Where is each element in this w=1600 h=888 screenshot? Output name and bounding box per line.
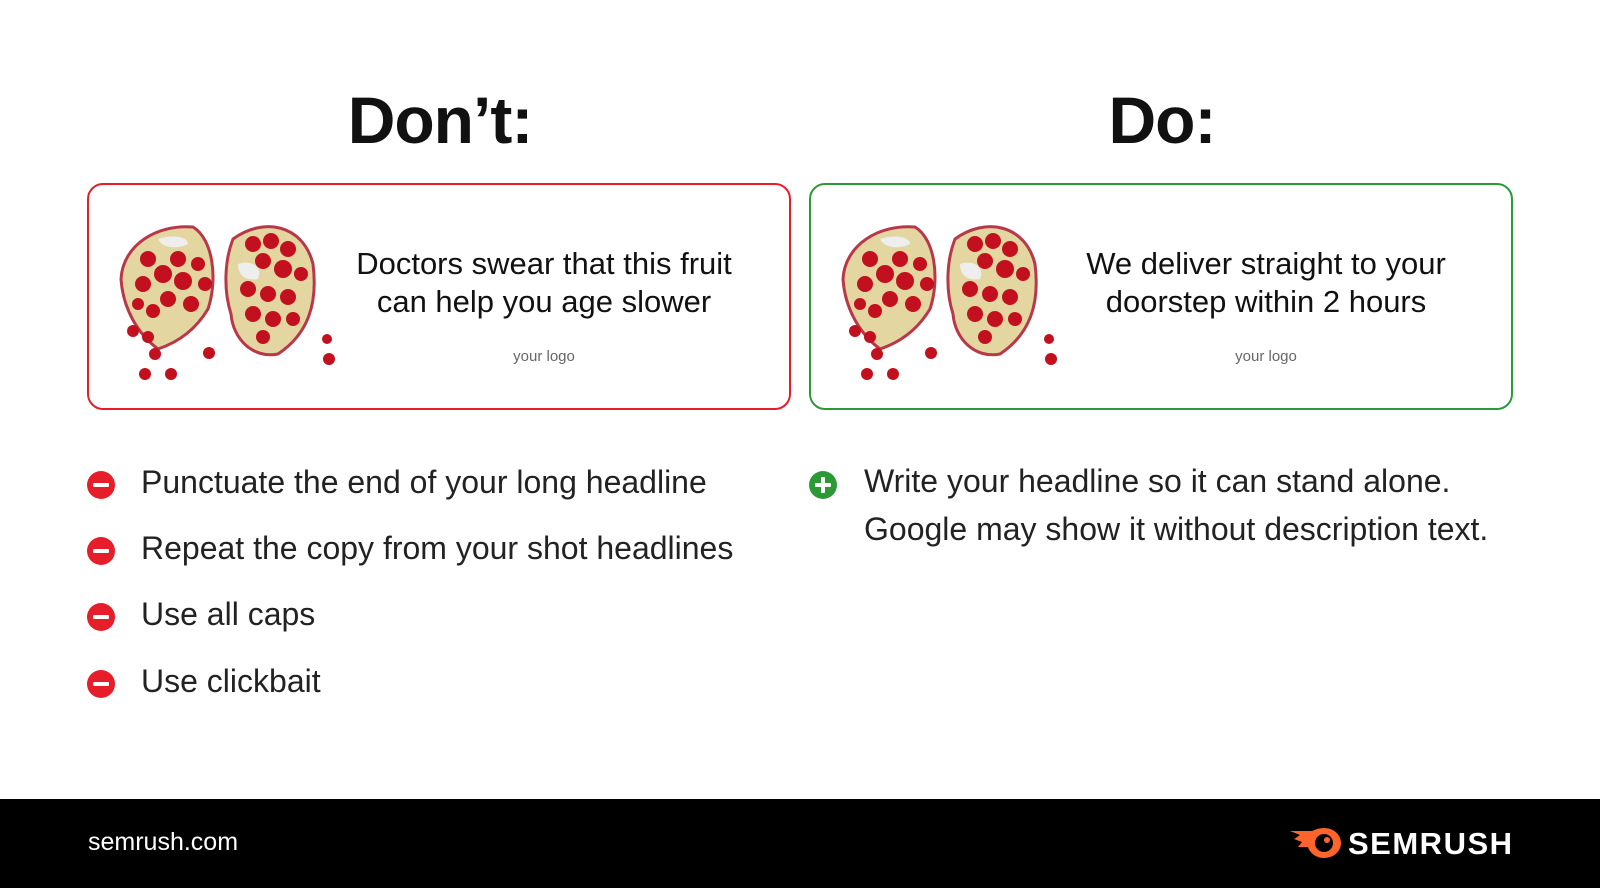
ad headline: We deliver straight to your xyxy=(1086,246,1446,281)
panel: dont example ad xyxy=(87,183,791,410)
logo wordmark: SEMRUSH xyxy=(1348,826,1514,861)
footer xyxy=(0,799,1600,888)
ad logo placeholder: your logo xyxy=(1235,348,1297,365)
item: Punctuate the end of your long headline xyxy=(141,464,707,500)
footer url: semrush.com xyxy=(88,828,238,856)
icon: plus xyxy=(809,471,837,499)
item: Google may show it without description text. xyxy=(864,511,1488,547)
item: Use clickbait xyxy=(141,663,321,699)
item: Use all caps xyxy=(141,596,315,632)
item: Write your headline so it can stand alone. xyxy=(864,463,1450,499)
semrush logo xyxy=(1290,826,1514,861)
icon: minus xyxy=(87,471,115,499)
item xyxy=(864,463,1488,547)
item: Repeat the copy from your shot headlines xyxy=(141,530,733,566)
list: do xyxy=(809,463,1488,547)
ad headline xyxy=(356,246,732,319)
list: don'ts xyxy=(87,464,733,699)
image: pomegranate xyxy=(120,225,335,380)
image: pomegranate xyxy=(842,225,1057,380)
panel: do example ad xyxy=(809,183,1513,410)
ad logo placeholder: your logo xyxy=(513,348,575,365)
ad headline: Doctors swear that this fruit xyxy=(356,246,732,281)
heading: do: Do: xyxy=(1109,83,1215,157)
heading: don't: Don’t: xyxy=(348,83,532,157)
icon: minus xyxy=(87,537,115,565)
ad headline: doorstep within 2 hours xyxy=(1106,284,1426,319)
ad headline xyxy=(1086,246,1446,319)
icon: minus xyxy=(87,670,115,698)
ad headline: can help you age slower xyxy=(377,284,711,319)
icon: minus xyxy=(87,603,115,631)
icon: semrush fireball xyxy=(1290,828,1341,858)
